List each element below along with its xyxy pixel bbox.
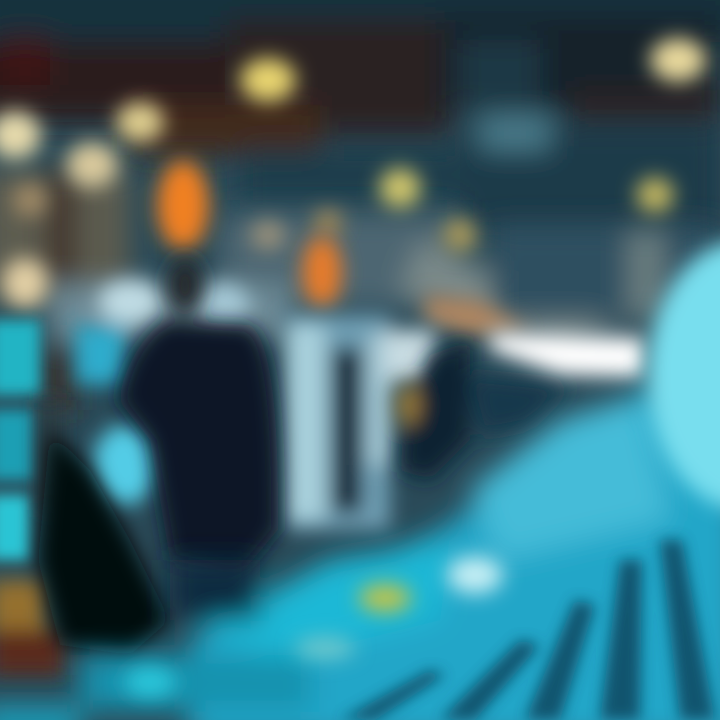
figure: dark foreground shape [38,430,170,655]
cyan and pale patches beside figures [75,280,250,505]
white glow band [490,332,645,378]
mid wall tones [0,170,720,410]
figure: man in light suit [285,315,435,530]
orange highlights and faces [157,160,530,335]
left cyan panels [0,320,40,560]
figure: third man on right [397,340,570,480]
bottom right dark streaks [340,540,715,720]
bottom left brown area [0,400,65,675]
figure: man in dark suit [118,257,278,575]
ceiling: dark tones [0,0,720,235]
right cyan orb [647,240,720,510]
bright highlights on wave [124,556,503,697]
ceiling lights [0,38,706,308]
bottom cyan wave [0,385,720,720]
